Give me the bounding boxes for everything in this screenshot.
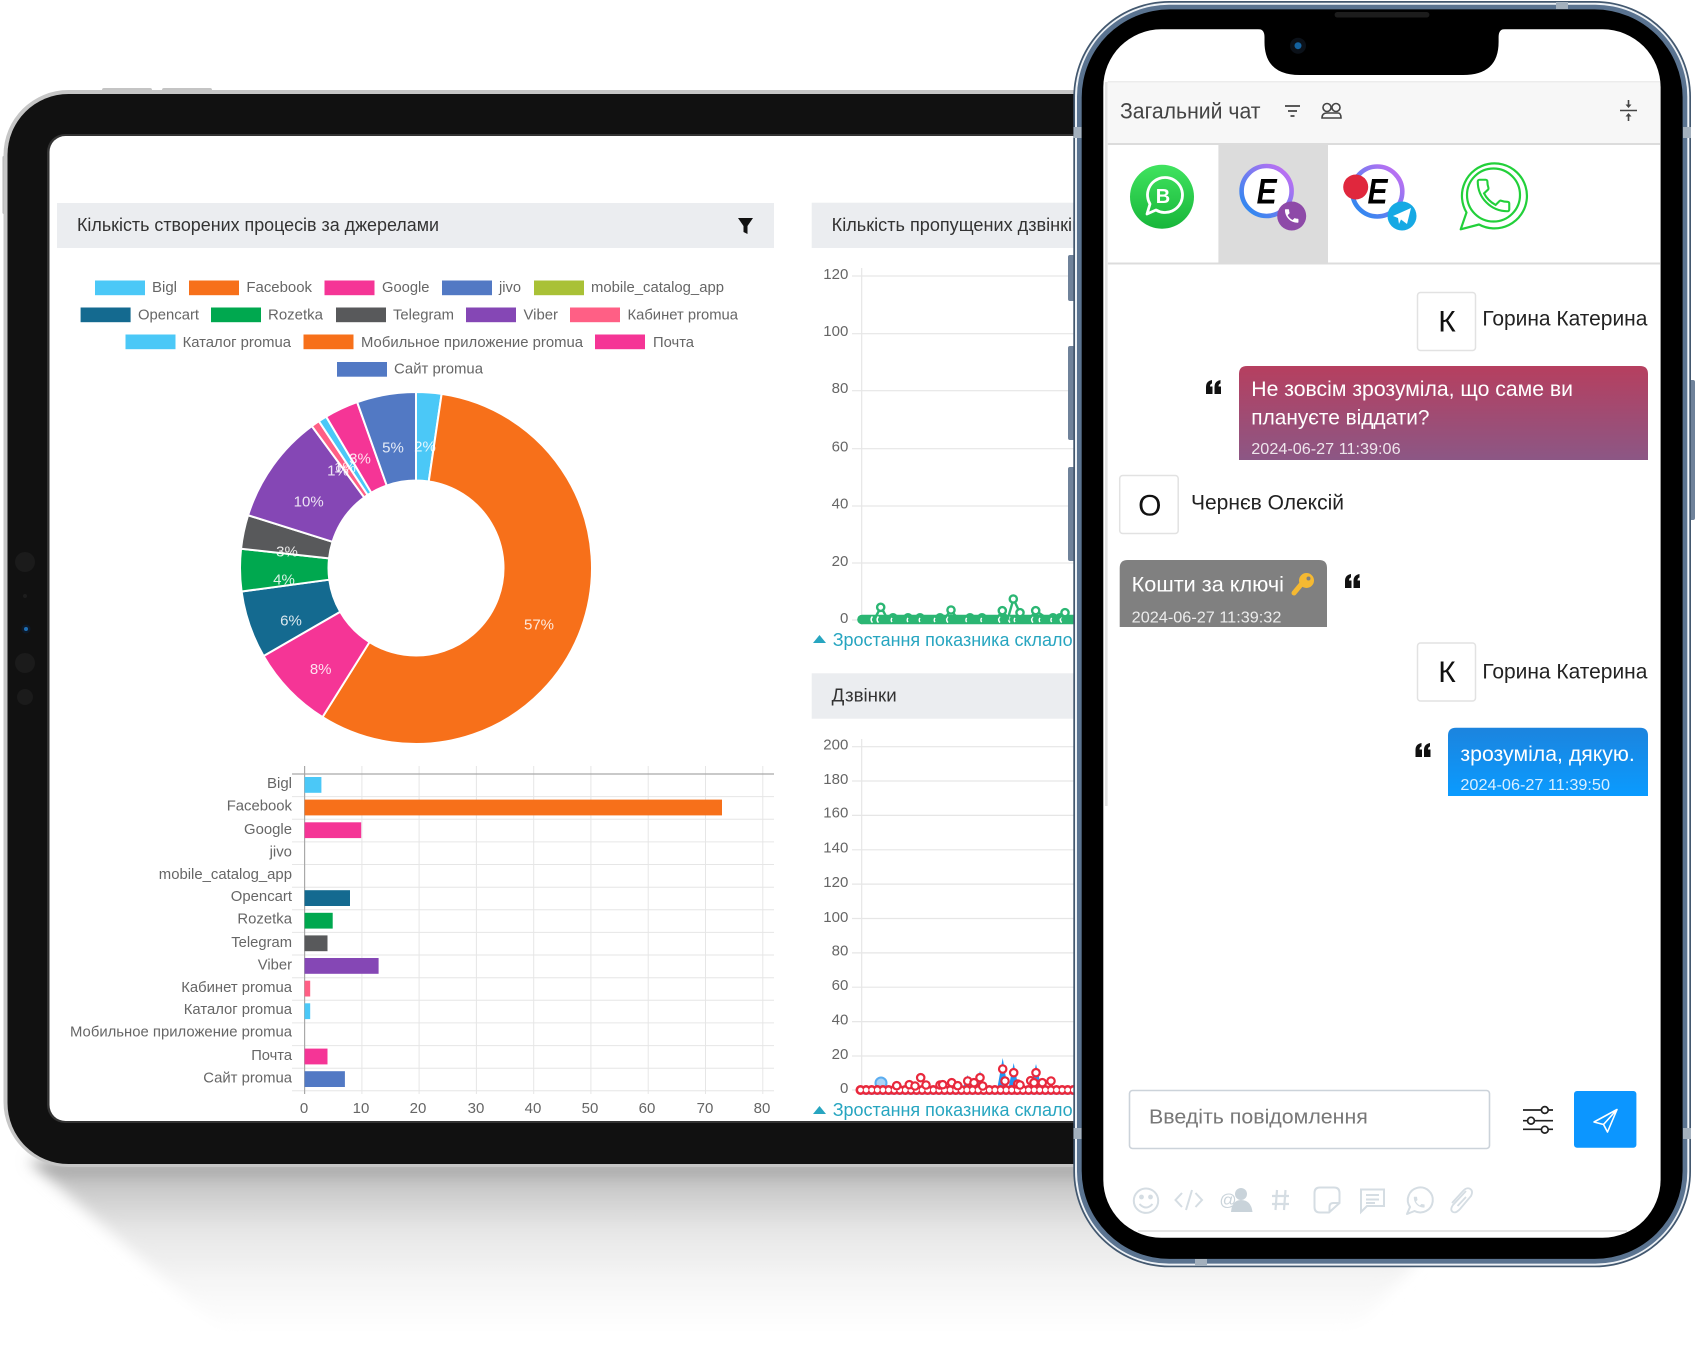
line chart: missed calls (823, 266, 1080, 627)
legend: jivo (498, 279, 521, 296)
icon: hash (1272, 1190, 1289, 1210)
horizontal bar chart: Opencart (231, 888, 293, 905)
icon: filter lines (1285, 106, 1300, 116)
trend note: calls: Зростання показника склало (833, 1100, 1073, 1120)
message bubble: blue: 2024-06-27 11:39:50 (1460, 777, 1610, 794)
line chart: missed calls: 120 (823, 266, 848, 283)
panel header: calls (812, 673, 1212, 719)
horizontal bar chart: Каталог promua (184, 1001, 293, 1018)
legend: Facebook (246, 279, 312, 296)
channel tabs (1108, 145, 1660, 264)
icon: Viber channel (1242, 166, 1306, 230)
message input (1130, 1090, 1490, 1148)
front camera (1290, 38, 1306, 54)
icon: WhatsApp (1461, 163, 1527, 229)
icon: mention user: @ (1219, 1190, 1237, 1210)
panel header: calls: Дзвінки (832, 686, 897, 706)
icon: people (1322, 104, 1341, 118)
panel header: missed calls (812, 203, 1212, 248)
legend: Viber (524, 306, 558, 324)
line chart: calls: 160 (823, 804, 848, 822)
chat header bar: Загальний чат (1120, 98, 1260, 124)
chat left border (1105, 82, 1108, 806)
horizontal bar chart: 50 (582, 1100, 598, 1117)
quote icon (1345, 574, 1360, 588)
legend: Telegram (393, 306, 454, 324)
line chart: missed calls: 100 (823, 323, 848, 340)
phone side buttons (1068, 255, 1695, 561)
icon: Telegram channel: E (1368, 172, 1389, 212)
composer toolbar icons (1134, 1187, 1472, 1214)
icon: settings sliders (1523, 1107, 1553, 1133)
horizontal bar chart: Bigl (267, 775, 292, 792)
donut chart (240, 392, 592, 744)
tablet device (2, 88, 1504, 1167)
line chart: missed calls: 40 (832, 496, 848, 512)
legend: Opencart (138, 306, 200, 324)
message input: Введіть повідомлення (1149, 1106, 1368, 1128)
horizontal bar chart: 20 (410, 1100, 426, 1117)
line chart: missed calls: 20 (832, 553, 848, 570)
donut chart: 1% (327, 462, 349, 480)
author: Горина Катерина second (1418, 643, 1648, 701)
legend: Кабинет promua (628, 306, 739, 324)
quote icon (1206, 380, 1221, 394)
donut chart: 5% (382, 440, 404, 456)
message bubble: grey: 2024-06-27 11:39:32 (1132, 609, 1281, 626)
legend (81, 279, 739, 378)
quote icon (1416, 743, 1430, 757)
donut chart: 6% (280, 612, 302, 630)
line chart: calls: 200 (823, 736, 848, 754)
chat header bar (1108, 82, 1660, 144)
horizontal bar chart: Telegram (231, 934, 292, 951)
legend: Bigl (152, 279, 177, 296)
line chart: calls: 0 (840, 1080, 848, 1097)
donut chart: 3% (349, 450, 371, 468)
donut chart: 57% (524, 616, 554, 634)
legend: mobile_catalog_app (591, 279, 724, 296)
line chart: calls: 180 (823, 771, 848, 788)
icon: Viber channel: E (1257, 172, 1278, 212)
legend: Мобильное приложение promua (361, 334, 584, 351)
message bubble: grey (1120, 560, 1327, 627)
legend: Rozetka (268, 306, 324, 324)
horizontal bar chart: jivo (269, 844, 292, 861)
legend: Сайт promua (394, 360, 484, 378)
horizontal bar chart: Facebook (227, 797, 292, 814)
line chart: calls: 60 (832, 977, 848, 994)
legend: Каталог promua (183, 334, 292, 351)
icon: sticker (1314, 1188, 1340, 1212)
donut chart: 8% (310, 661, 332, 678)
panel header: created processes by source (57, 203, 774, 248)
horizontal bar chart: Сайт promua (203, 1070, 293, 1087)
selected tab (1218, 145, 1328, 263)
horizontal bar chart: mobile_catalog_app (159, 866, 292, 883)
icon: WhatsApp Business: B (1156, 186, 1170, 208)
horizontal bar chart: Viber (258, 956, 292, 974)
author: Горина Катерина: К (1438, 306, 1456, 338)
phone screen (1103, 29, 1661, 1238)
icon: key emoji (1294, 573, 1314, 593)
horizontal bar chart: Google (244, 821, 292, 838)
icon: whatsapp outline (1407, 1187, 1433, 1214)
icon: code (1176, 1190, 1202, 1210)
donut chart: 4% (273, 572, 295, 588)
horizontal bar chart: 80 (754, 1100, 770, 1117)
message bubble: grey: Кошти за ключі (1132, 574, 1284, 596)
line chart: missed calls: 0 (840, 610, 848, 627)
line chart: calls: 100 (823, 909, 848, 926)
line chart: calls (823, 736, 1080, 1097)
horizontal bar chart: 0 (300, 1100, 308, 1117)
author: Чернєв Олексій (1120, 476, 1344, 534)
icon: WhatsApp Business (1130, 165, 1194, 229)
message bubble: pink: плануєте віддати? (1251, 406, 1430, 430)
tablet camera cluster (15, 552, 35, 705)
icon: smile (1134, 1188, 1158, 1213)
icon: paperclip (1451, 1188, 1472, 1212)
icon: compress (1620, 100, 1637, 121)
message bubble: blue: зрозуміла, дякую. (1460, 743, 1635, 766)
message bubble: blue (1448, 728, 1648, 796)
horizontal bar chart: Почта (251, 1047, 293, 1064)
horizontal bar chart: Rozetka (237, 910, 293, 927)
donut chart: 1% (334, 460, 356, 476)
horizontal bar chart: 60 (639, 1100, 655, 1117)
icon: Telegram channel (1343, 166, 1416, 230)
horizontal bar chart: Мобильное приложение promua (70, 1023, 293, 1040)
line chart: missed calls: 60 (832, 438, 848, 456)
panel header: created processes by source: Кількість створених процесів за джерелами (77, 215, 439, 235)
tablet drop shadow (28, 1160, 1510, 1345)
horizontal bar chart: 30 (468, 1100, 484, 1117)
line chart: calls: 40 (832, 1012, 848, 1028)
line chart: calls: 140 (823, 840, 848, 856)
donut chart: 3% (276, 544, 298, 560)
icon: comment (1361, 1190, 1384, 1212)
horizontal bar chart (70, 766, 774, 1117)
tablet screen (50, 136, 1480, 1121)
trend note: missed calls: Зростання показника склало (833, 630, 1073, 650)
horizontal bar chart: 70 (697, 1100, 713, 1117)
author: Горина Катерина second: К (1438, 656, 1456, 689)
notch (1258, 29, 1505, 75)
speaker (1335, 12, 1429, 18)
icon: filter (738, 218, 753, 234)
horizontal bar chart: 10 (353, 1100, 369, 1117)
line chart: calls: 120 (823, 874, 848, 891)
legend: Google (382, 279, 430, 296)
line chart: missed calls: 80 (832, 380, 848, 397)
phone device (1068, 1, 1695, 1267)
legend: Почта (653, 334, 695, 351)
message bubble: pink: Не зовсім зрозуміла, що саме ви (1251, 378, 1573, 401)
message bubble: pink: 2024-06-27 11:39:06 (1251, 441, 1401, 458)
donut chart: 2% (414, 438, 436, 456)
author: Горина Катерина second: Горина Катерина (1482, 660, 1648, 684)
author: Горина Катерина (1418, 292, 1648, 350)
send button (1574, 1091, 1636, 1148)
horizontal bar chart: Кабинет promua (181, 979, 293, 996)
author: Чернєв Олексій: О (1138, 490, 1161, 522)
panel header: missed calls: Кількість пропущених дзвінків (832, 215, 1082, 235)
line chart: calls: 20 (832, 1046, 848, 1063)
author: Горина Катерина: Горина Катерина (1482, 308, 1648, 330)
author: Чернєв Олексій: Чернєв Олексій (1191, 492, 1344, 514)
message bubble: pink (1239, 366, 1648, 460)
icon: mention user (1219, 1188, 1252, 1212)
screen bottom strip (1138, 1230, 1627, 1232)
donut chart: 10% (294, 494, 324, 510)
horizontal bar chart: 40 (525, 1100, 541, 1117)
line chart: calls: 80 (832, 942, 848, 960)
